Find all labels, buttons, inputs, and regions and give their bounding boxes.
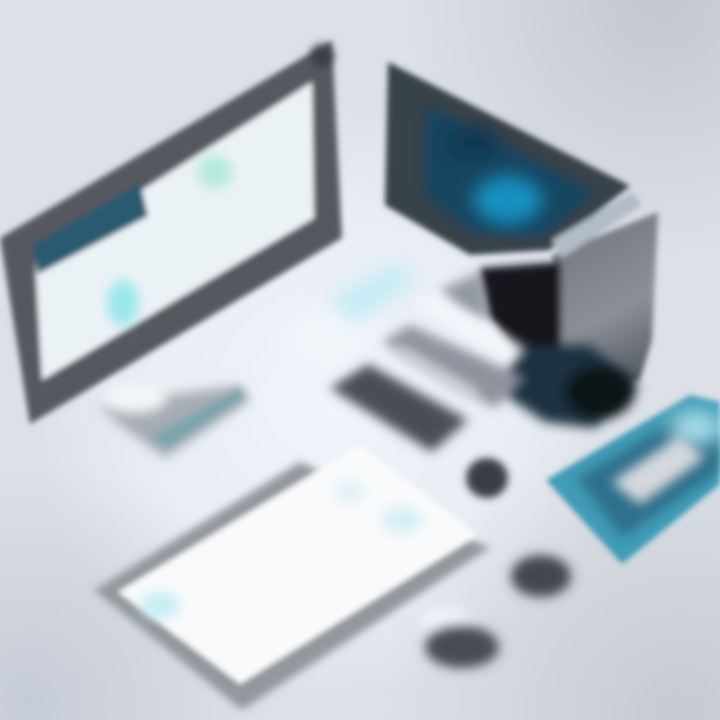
grey bracket <box>440 272 490 322</box>
frame corner dark <box>310 44 334 68</box>
device 3 highlight <box>419 606 471 634</box>
device 3 body <box>425 626 499 668</box>
right monitor <box>385 62 630 255</box>
tablet screen <box>118 445 478 684</box>
tower top bar <box>552 192 642 258</box>
keyboard white stripe <box>410 292 525 370</box>
monitor stand <box>100 383 250 458</box>
right monitor screen <box>425 105 595 236</box>
blue box <box>546 395 720 564</box>
screen glow <box>474 176 542 224</box>
tower black column <box>480 262 560 370</box>
base dark end <box>566 366 634 418</box>
round device 2 <box>511 555 571 597</box>
pale card <box>280 300 380 372</box>
tablet cyan blob left <box>140 591 180 619</box>
keyboard upper band <box>382 325 525 408</box>
left monitor <box>0 40 342 458</box>
stand teal strip <box>150 388 245 448</box>
screen teal banner <box>32 182 148 274</box>
tablet cyan blob right <box>382 506 422 534</box>
right monitor frame <box>385 62 630 255</box>
tower base <box>505 345 638 428</box>
keyboard light gap <box>392 346 480 400</box>
floating cards <box>330 260 416 324</box>
tower side <box>552 212 658 400</box>
monitor screen <box>35 82 314 380</box>
box inner light <box>669 410 720 446</box>
stand base shadow <box>100 385 250 458</box>
screen highlight: upper mint blob <box>197 155 233 189</box>
screen dark patch <box>449 129 497 157</box>
tablet <box>94 445 490 710</box>
floating cyan card <box>330 262 415 325</box>
screen highlight: lower cyan blob <box>107 280 139 326</box>
tablet cyan blob upper <box>334 480 366 504</box>
box inner dark <box>578 418 720 538</box>
round device 3 <box>419 606 499 668</box>
monitor frame <box>0 40 342 424</box>
round device 1 <box>466 458 508 498</box>
stand white top <box>103 383 167 413</box>
keyboard <box>330 292 525 452</box>
keyboard dark keys <box>330 364 468 452</box>
box body <box>546 395 720 564</box>
computer tower <box>440 192 658 428</box>
box label <box>612 436 704 504</box>
tablet frame <box>94 462 490 710</box>
